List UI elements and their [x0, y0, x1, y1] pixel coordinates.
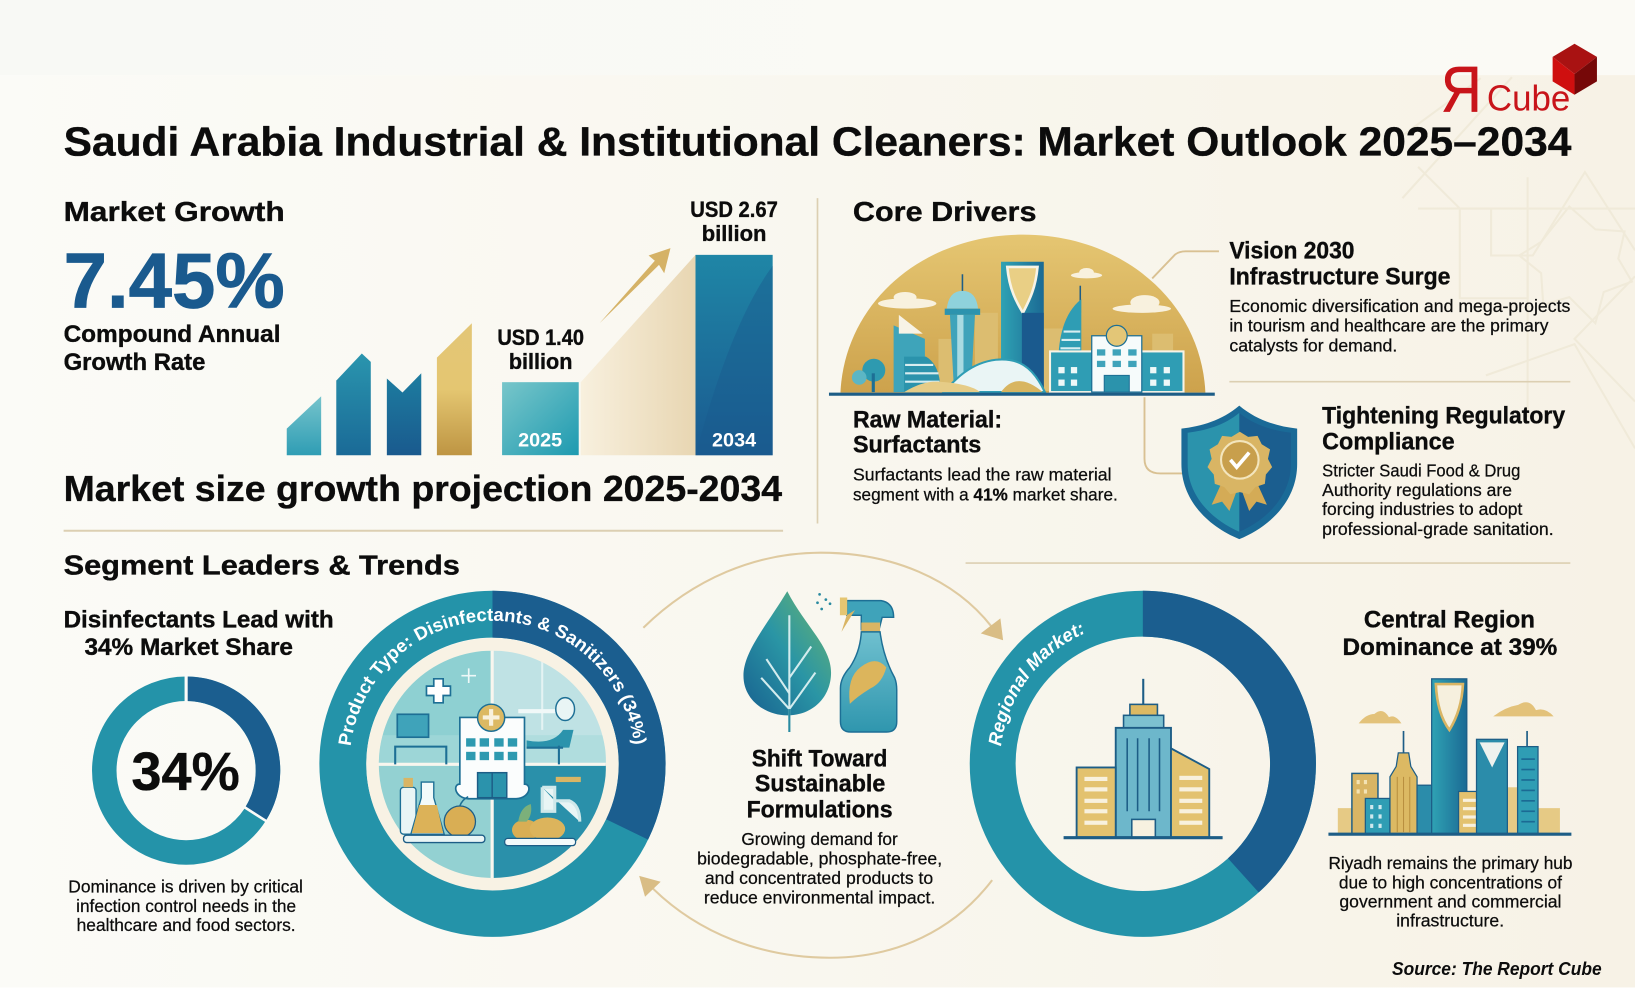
subheading: disinfectants: Disinfectants Lead with	[64, 606, 334, 633]
heading: central region	[1343, 606, 1557, 661]
logo: RCube: Cube	[1487, 78, 1570, 119]
heading: segment leaders: Segment Leaders & Trends	[64, 550, 460, 581]
text: shift toward sustainable formulations: and concentrated products to	[705, 868, 933, 888]
text: tightening regulatory compliance: forcing industries to adopt	[1322, 499, 1522, 519]
text: tightening regulatory compliance: Stricter Saudi Food & Drug	[1322, 461, 1520, 481]
panel: segment leaders and trends	[64, 550, 1573, 959]
illustration: saudi skyline dome	[829, 235, 1215, 394]
heading: central region: Central Region	[1364, 606, 1535, 633]
ring: product type: Product Type: Disinfectants & Sanitizers (34%)	[338, 608, 647, 746]
text: vision 2030: Economic diversification and mega-projects	[1229, 296, 1570, 316]
arrow: top cycle arc	[643, 553, 1003, 640]
text: riyadh: infrastructure.	[1396, 911, 1504, 931]
heading: core drivers: Core Drivers	[853, 196, 1036, 227]
icon: leaf	[743, 591, 831, 732]
text: shift toward sustainable formulations	[697, 746, 942, 907]
text: riyadh: government and commercial	[1339, 892, 1561, 912]
text: dominance: Dominance is driven by critical	[68, 877, 303, 897]
panel: core drivers	[829, 196, 1570, 539]
text: shift toward sustainable formulations: biodegradable, phosphate-free,	[697, 848, 942, 868]
source note: Source: The Report Cube	[1392, 958, 1602, 979]
ring: regional market	[970, 590, 1316, 937]
title: Saudi Arabia Industrial & Institutional Cleaners: Market Outlook 2025–2034	[64, 118, 1572, 164]
label: compound annual growth rate	[64, 321, 280, 376]
heading: central region: Dominance at 39%	[1343, 634, 1557, 661]
illustration: hospital and food scene	[366, 638, 619, 891]
label: compound annual growth rate: Compound Annual	[64, 321, 280, 348]
label: USD 1.40 billion: USD 1.40	[497, 325, 584, 350]
logo: RCube: Я	[1441, 53, 1482, 126]
arrow: growth	[600, 248, 670, 323]
subheading: disinfectants	[64, 606, 334, 661]
text: raw material surfactants: segment with a 41% market share.	[853, 485, 1118, 505]
label: USD 2.67 billion: USD 2.67	[690, 197, 778, 222]
text: vision 2030: catalysts for demand.	[1229, 335, 1397, 355]
text: raw material surfactants: Surfactants lead the raw material	[853, 464, 1112, 484]
text: raw material surfactants	[853, 407, 1118, 505]
text: shift toward sustainable formulations: Formulations	[747, 797, 893, 824]
decorative rising bars	[287, 323, 472, 455]
text: tightening regulatory compliance	[1322, 402, 1566, 539]
text: riyadh: due to high concentrations of	[1339, 872, 1562, 892]
connector lines	[1144, 251, 1219, 473]
big number: CAGR: 7.45%	[64, 237, 285, 325]
icon: office building	[1064, 679, 1223, 838]
text: riyadh: Riyadh remains the primary hub	[1328, 853, 1573, 873]
bar chart: market size 2025 to 2034	[502, 255, 773, 455]
icon: shield with rosette	[1181, 406, 1297, 539]
donut chart: 34 percent	[104, 674, 268, 852]
heading: market growth: Market Growth	[64, 196, 285, 227]
text: vision 2030: Vision 2030	[1229, 238, 1355, 265]
label: compound annual growth rate: Growth Rate	[64, 349, 205, 376]
text: shift toward sustainable formulations: Growing demand for	[741, 829, 898, 849]
text: shift toward sustainable formulations: Sustainable	[755, 771, 885, 798]
arrow: bottom cycle arc	[639, 876, 992, 958]
text: shift toward sustainable formulations: reduce environmental impact.	[704, 887, 935, 907]
label: USD 1.40 billion: billion	[509, 349, 572, 374]
text: tightening regulatory compliance: Tightening Regulatory	[1322, 402, 1566, 429]
text: tightening regulatory compliance: Compliance	[1322, 428, 1455, 455]
subheading: disinfectants: 34% Market Share	[84, 634, 293, 661]
illustration: riyadh skyline	[1328, 679, 1571, 834]
text: vision 2030: in tourism and healthcare are the primary	[1229, 316, 1549, 336]
bar chart: market size 2025 to 2034: 2025	[518, 429, 562, 451]
text: raw material surfactants: Surfactants	[853, 432, 981, 459]
label: USD 2.67 billion	[690, 197, 778, 246]
text: riyadh	[1328, 853, 1573, 931]
text: dominance	[68, 877, 303, 935]
text: raw material surfactants: Raw Material:	[853, 407, 1002, 434]
ring: product type	[319, 590, 666, 937]
label: USD 1.40 billion	[497, 325, 584, 374]
label: USD 2.67 billion: billion	[702, 221, 766, 246]
text: vision 2030	[1229, 238, 1570, 355]
text: tightening regulatory compliance: Authority regulations are	[1322, 480, 1512, 500]
chart caption: Market size growth projection 2025-2034	[64, 468, 783, 509]
bar chart: market size 2025 to 2034: 2034	[712, 429, 756, 451]
icon: spray bottle	[816, 593, 897, 732]
text: tightening regulatory compliance: professional-grade sanitation.	[1322, 519, 1554, 539]
text: dominance: healthcare and food sectors.	[77, 915, 296, 935]
ring: regional market: Regional Market:	[988, 624, 1084, 746]
panel: market growth	[64, 196, 783, 509]
donut chart: 34 percent: 34%	[131, 742, 240, 802]
text: shift toward sustainable formulations: Shift Toward	[752, 746, 887, 773]
logo: RCube	[1441, 44, 1597, 126]
text: vision 2030: Infrastructure Surge	[1229, 264, 1450, 291]
text: dominance: infection control needs in the	[76, 896, 296, 916]
